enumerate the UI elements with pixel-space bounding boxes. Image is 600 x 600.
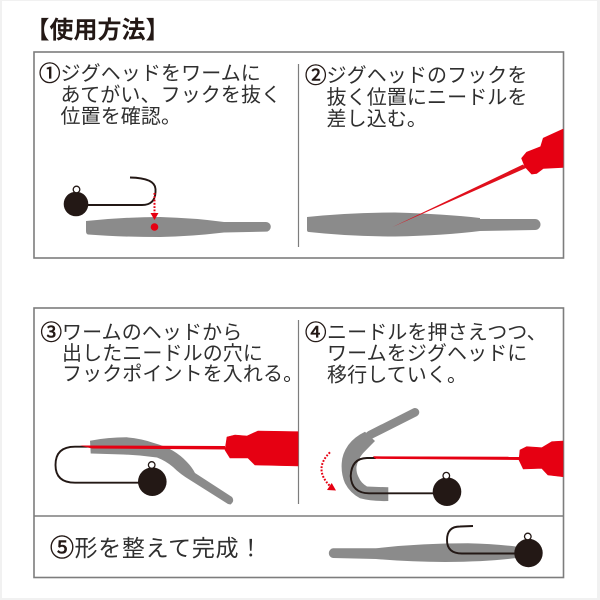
step 3 text: フックポイントを入れる。 <box>62 362 303 386</box>
step 3 text: ③ <box>40 321 62 345</box>
step 1 text: あてがい、フックを抜く <box>60 84 281 106</box>
red target dot <box>151 223 158 231</box>
needle <box>392 164 526 227</box>
step 5 text: 形を整えて完成！ <box>74 535 263 561</box>
needle <box>80 446 225 450</box>
step 2 text: 抜く位置にニードルを <box>326 86 528 109</box>
step 3 text: ワームのヘッドから <box>62 322 242 344</box>
step 4 text: ④ <box>305 321 327 345</box>
panel: steps 3, 4 and 5 <box>34 308 564 578</box>
step 1 text: ジグヘッドをワームに <box>60 62 261 85</box>
jig head ball <box>514 533 543 567</box>
syringe <box>519 441 563 477</box>
panel: steps 1 and 2 <box>34 52 564 258</box>
step 2 text: ジグヘッドのフックを <box>326 64 528 87</box>
step 4 text <box>305 321 547 386</box>
syringe <box>522 129 563 174</box>
worm <box>86 217 271 237</box>
jig head hook <box>56 447 142 483</box>
step 1 text: 位置を確認。 <box>60 105 181 128</box>
worm <box>329 543 516 562</box>
step 1 text: ① <box>39 62 61 86</box>
step 2 illustration: needle inserted into worm <box>307 129 563 236</box>
step 4 text: ニードルを押さえつつ、 <box>327 321 547 344</box>
worm <box>307 212 540 236</box>
jig head ball <box>64 186 88 216</box>
step 2 text <box>305 64 528 130</box>
worm <box>90 437 233 504</box>
step 1 text <box>39 62 281 128</box>
step 3 illustration: hook point entering needle <box>56 431 298 504</box>
step 5 illustration: finished rig <box>329 526 543 567</box>
step 4 text: 移行していく。 <box>327 364 467 386</box>
jig head hook <box>447 526 516 554</box>
needle <box>373 456 520 460</box>
hook and line <box>351 458 435 493</box>
step 4 illustration: worm moved onto jig head <box>322 412 563 506</box>
jig head hook <box>86 178 156 205</box>
step 4 text: ワームをジグヘッドに <box>327 342 527 365</box>
jig head ball <box>433 472 461 506</box>
title: 【使用方法】 <box>26 17 170 44</box>
red dotted arrow <box>150 193 158 220</box>
step 2 text: ② <box>305 64 327 88</box>
step 1 illustration: jig head above worm with red mark <box>64 178 271 237</box>
step 3 text <box>40 321 303 386</box>
step 5 text: ⑤ <box>50 535 75 562</box>
worm <box>342 412 415 501</box>
red dotted rotation arrow <box>322 452 336 490</box>
syringe <box>225 431 298 466</box>
step 3 text: 出したニードルの穴に <box>62 342 263 365</box>
jig head ball <box>138 462 167 496</box>
step 2 text: 差し込む。 <box>326 108 427 130</box>
